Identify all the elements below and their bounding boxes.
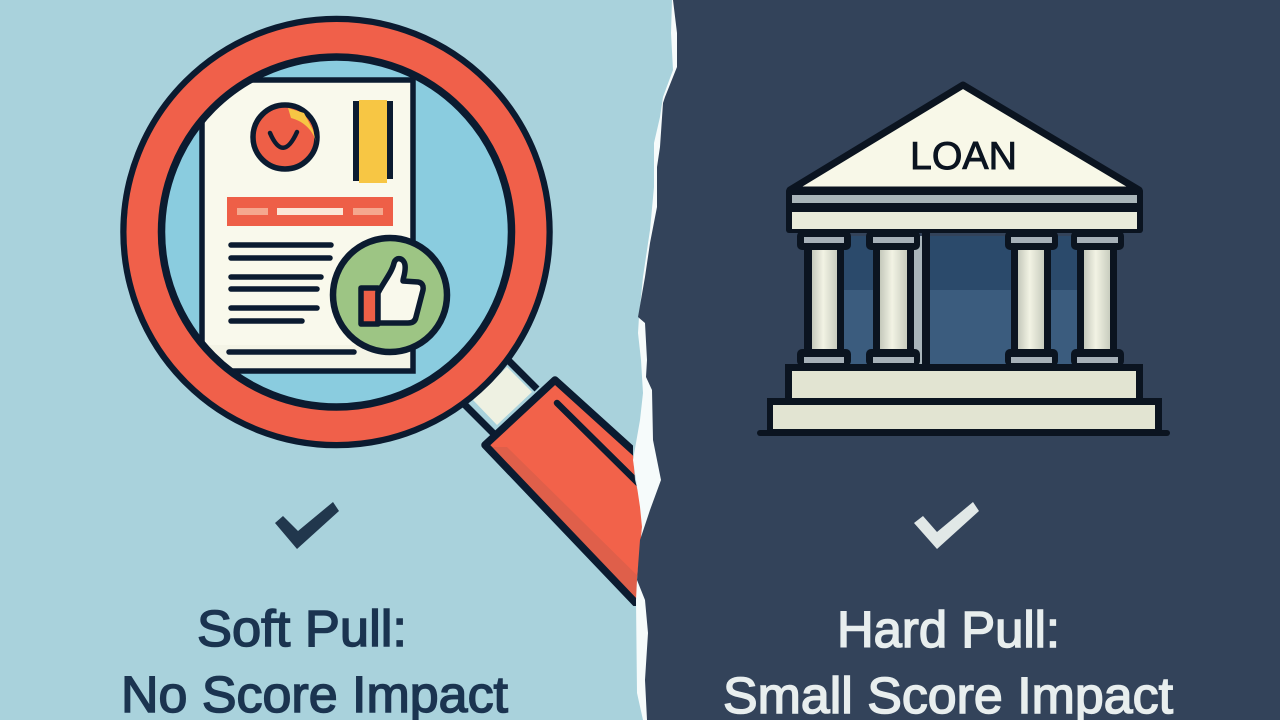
magnifier ring	[124, 20, 549, 444]
heading: hard pull: Hard Pull:	[837, 601, 1060, 658]
column 3	[1005, 231, 1058, 366]
torn paper edge	[633, 0, 700, 720]
red banner	[227, 197, 393, 226]
entablature	[786, 188, 1143, 233]
credit report document	[202, 80, 413, 371]
icon: check mark hard pull	[914, 502, 979, 549]
yellow card bar	[353, 100, 393, 183]
pediment with LOAN label: LOAN	[910, 135, 1017, 178]
lens background	[164, 60, 508, 404]
panel: soft pull background	[0, 0, 700, 720]
heading: hard pull	[723, 601, 1173, 720]
icon: bank building	[757, 85, 1170, 436]
icon: check mark soft pull	[275, 502, 339, 549]
document text lines	[229, 245, 354, 352]
panel: hard pull background	[637, 0, 1280, 720]
steps	[757, 364, 1170, 436]
thumbs-up badge	[333, 238, 447, 352]
magnifier handle	[464, 359, 650, 618]
interior door wall	[844, 233, 1089, 366]
column 4	[1071, 231, 1124, 366]
heading: soft pull	[121, 600, 508, 720]
column 2	[866, 231, 920, 366]
score dial	[253, 105, 317, 169]
heading: soft pull: Soft Pull:	[197, 600, 407, 657]
icon: magnifying glass over credit report	[124, 20, 650, 618]
column 1	[797, 231, 851, 366]
pediment with LOAN label	[790, 85, 1139, 190]
